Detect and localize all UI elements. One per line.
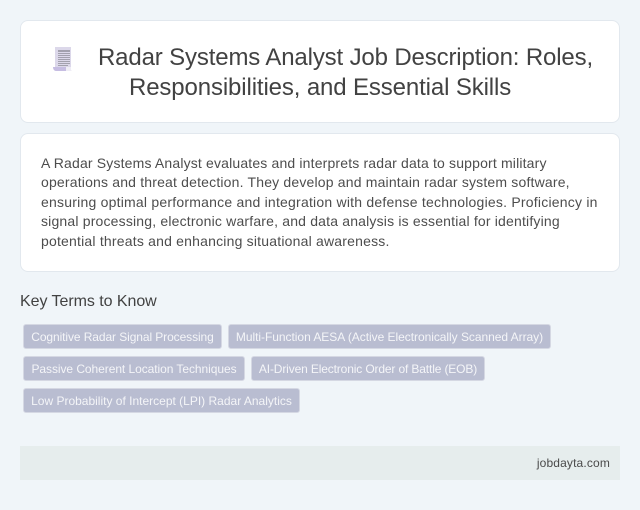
tag: LPI radar: Low Probability of Intercept (LPI) Radar Analytics (31, 394, 292, 408)
description text: operations and threat detection. They develop and maintain radar system software, (41, 174, 570, 190)
tag: cognitive radar (23, 324, 222, 349)
description text (41, 155, 598, 249)
panel: key term tags (23, 324, 551, 413)
panel: description (20, 133, 620, 272)
tag: AI-driven EOB: AI-Driven Electronic Order of Battle (EOB) (259, 362, 477, 376)
footer bar (20, 446, 620, 480)
tag: passive coherent (23, 356, 245, 381)
panel: title card (20, 20, 620, 123)
footer site name: jobdayta.com (537, 456, 610, 470)
tag: passive coherent: Passive Coherent Location Techniques (31, 362, 237, 376)
description text: A Radar Systems Analyst evaluates and interprets radar data to support military (41, 155, 547, 171)
tag: LPI radar (23, 388, 300, 413)
title: Responsibilities, and Essential Skills (129, 74, 511, 101)
tag: AI-driven EOB (251, 356, 485, 381)
tag: multi-function AESA (228, 324, 551, 349)
description text: ensuring optimal performance and integration with defense technologies. Proficiency in (41, 194, 598, 210)
description text: signal processing, electronic warfare, and data analysis is essential for identifying (41, 213, 560, 229)
title (98, 44, 593, 101)
description text: potential threats and enhancing situational awareness. (41, 233, 390, 249)
heading: key terms: Key Terms to Know (20, 293, 157, 310)
tag: multi-function AESA: Multi-Function AESA (Active Electronically Scanned Array) (236, 330, 543, 344)
tag: cognitive radar: Cognitive Radar Signal Processing (31, 330, 214, 344)
icon: document receipt (53, 47, 72, 71)
title: Radar Systems Analyst Job Description: Roles, (98, 44, 593, 71)
